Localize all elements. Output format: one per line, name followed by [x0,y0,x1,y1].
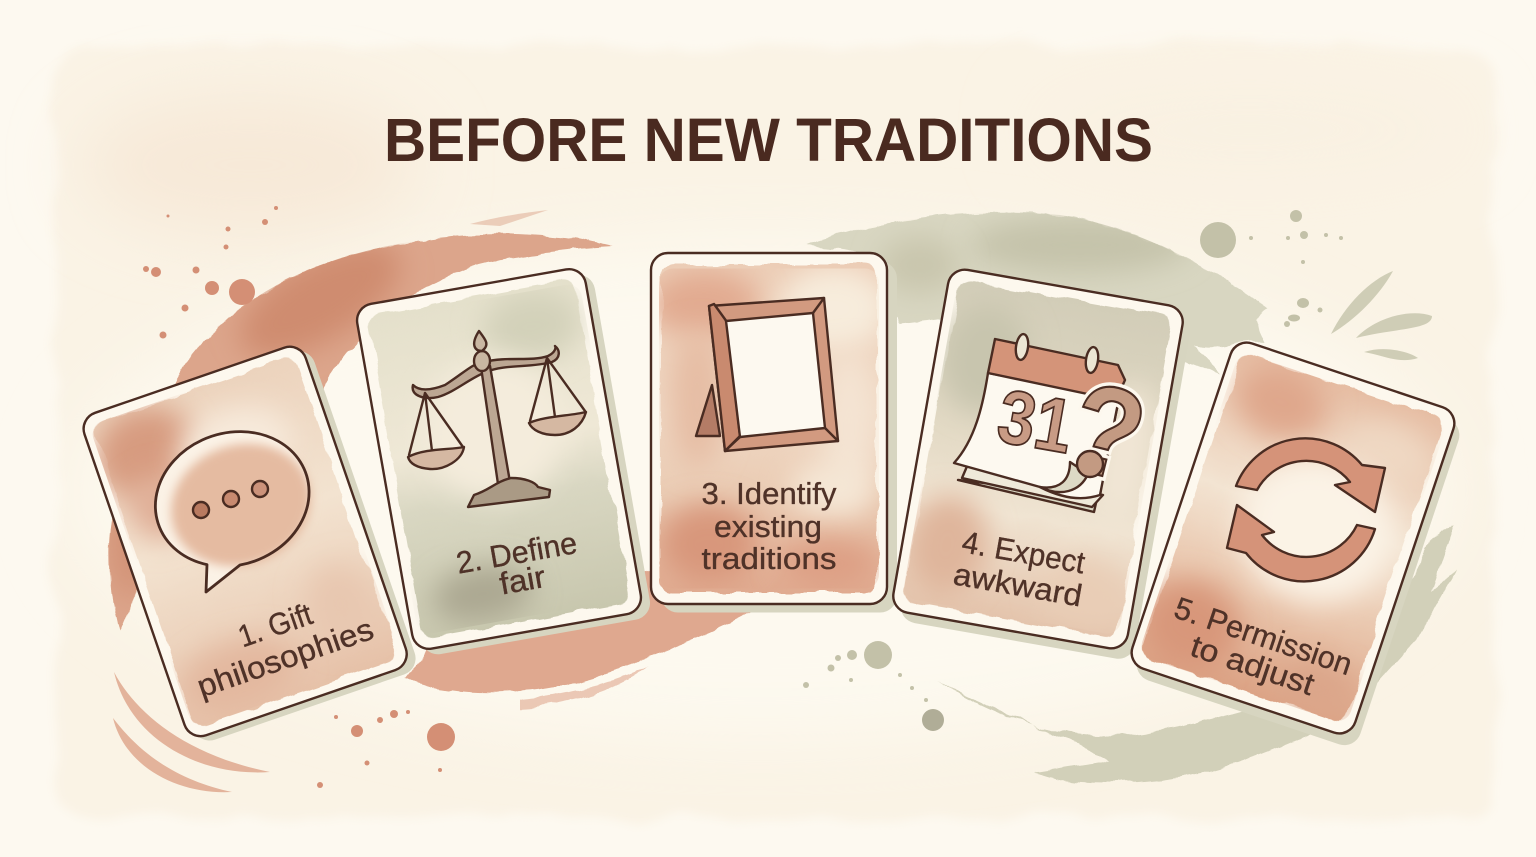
card 2: define fair [354,265,653,658]
card 1 label: 1. Gift [233,596,317,654]
terracotta splatter bottom [317,710,455,788]
card 5 label: to adjust [1186,628,1319,702]
icon: circular arrows [1227,438,1385,581]
card 4: expect awkward [889,267,1194,661]
card 2 label [453,525,585,608]
icon: balance scale [408,331,586,507]
sage brush arc upper right [808,212,1268,375]
card 2 label: fair [497,559,548,602]
icon: speech bubble [154,425,328,592]
card 3 label: traditions [702,541,836,576]
card 4 label: awkward [951,556,1085,613]
card 3 label: existing [714,509,822,544]
card 4 label [951,524,1091,613]
sage splatter top right [1200,210,1343,327]
title: BEFORE NEW TRADITIONS [384,106,1153,174]
sage swooshes right [1331,271,1432,360]
sage splatter lower middle [803,641,944,731]
card 1: gift philosophies [79,340,420,747]
icon: calendar with question mark [954,333,1159,512]
icon: calendar with question mark: 31 [992,374,1079,470]
icon: calendar with question mark: ? [1056,355,1159,510]
terracotta brush arc upper left [109,210,615,632]
card 2 label: 2. Define [453,525,580,581]
sage brush arc lower right [935,523,1457,783]
card 5: permission to adjust [1122,337,1467,750]
card 3: identify existing traditions [648,253,897,612]
icon: calendar with question mark: ? [1056,355,1159,510]
card 1 label: philosophies [193,611,378,704]
icon: picture frame [696,298,838,451]
card 3 label: 3. Identify [702,476,837,511]
terracotta splatter top left [143,206,278,338]
card 4 label: 4. Expect [959,524,1088,580]
card 1 label [181,579,378,704]
terracotta brush stroke lower centre [405,560,770,708]
card 3 label [702,476,837,576]
terracotta swooshes bottom left [113,672,270,792]
card 5 label: 5. Permission [1170,590,1357,682]
